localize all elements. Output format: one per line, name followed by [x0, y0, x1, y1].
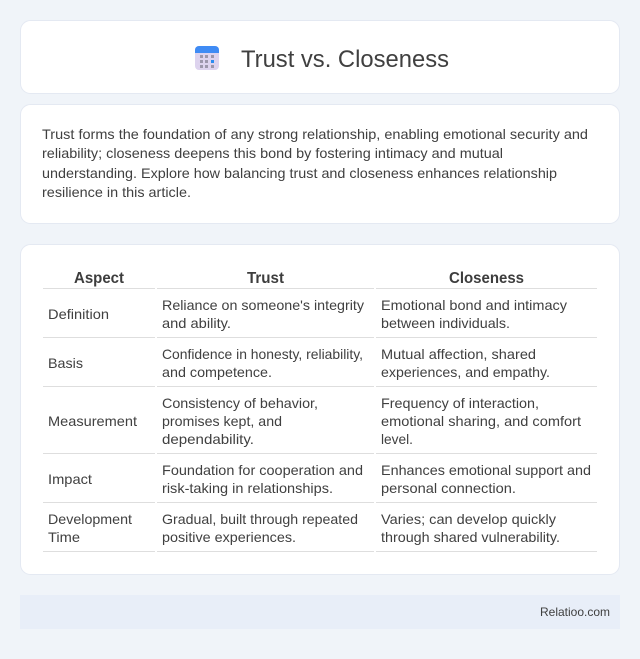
table header: Trust — [247, 270, 285, 287]
row: impact: Enhances emotional support and — [381, 462, 591, 478]
row: impact — [43, 462, 597, 502]
title: Trust vs. Closeness — [241, 46, 449, 73]
row: impact: risk-taking in relationships. — [162, 480, 333, 496]
table header — [43, 270, 597, 288]
row: basis: Confidence in honesty, reliability, — [162, 346, 363, 362]
row: development time: through shared vulnerability. — [381, 529, 560, 545]
footer text: Relatioo.com — [540, 605, 610, 619]
icon: calendar — [195, 46, 219, 70]
row: definition: between individuals. — [381, 315, 510, 331]
panel: title card — [20, 20, 620, 94]
row: definition — [43, 297, 597, 338]
row: measurement: dependability. — [162, 431, 254, 447]
row: measurement: Frequency of interaction, — [381, 395, 539, 411]
text block: introduction: reliability; closeness deepens this bond by fostering intimacy and mutual — [42, 145, 503, 161]
row: basis: Mutual affection, shared — [381, 346, 536, 362]
row: development time: positive experiences. — [162, 529, 296, 545]
text block: introduction: Trust forms the foundation of any strong relationship, enabling emotional security and — [42, 126, 588, 142]
row: basis: Basis — [48, 355, 83, 371]
row: impact: Impact — [48, 471, 92, 487]
row: basis: and competence. — [162, 364, 272, 380]
text block: introduction — [42, 126, 588, 200]
row: development time: Development — [48, 511, 132, 527]
table header: Aspect — [74, 270, 125, 287]
row: measurement: level. — [381, 431, 413, 447]
row: definition: Reliance on someone's integrity — [162, 297, 364, 313]
row: definition: Emotional bond and intimacy — [381, 297, 567, 313]
row: development time: Time — [48, 529, 80, 545]
row: development time — [43, 511, 597, 552]
row: development time: Gradual, built through repeated — [162, 511, 358, 527]
row: impact: Foundation for cooperation and — [162, 462, 363, 478]
table header: Closeness — [449, 270, 524, 287]
row: measurement: emotional sharing, and comfort — [381, 413, 581, 429]
text block: introduction: resilience in this article. — [42, 184, 191, 200]
row: measurement — [43, 395, 597, 454]
row: development time: Varies; can develop quickly — [381, 511, 556, 527]
footer bar — [20, 595, 620, 629]
panel: introduction — [20, 104, 620, 224]
panel: comparison table — [20, 244, 620, 574]
row: basis: experiences, and empathy. — [381, 364, 550, 380]
row: basis — [43, 346, 597, 386]
row: measurement: Measurement — [48, 413, 137, 429]
text block: introduction: understanding. Explore how balancing trust and closeness enhances relationship — [42, 165, 557, 181]
row: measurement: promises kept, and — [162, 413, 282, 429]
row: measurement: Consistency of behavior, — [162, 395, 318, 411]
row: definition: Definition — [48, 306, 109, 322]
row: definition: and ability. — [162, 315, 231, 331]
row: impact: personal connection. — [381, 480, 516, 496]
